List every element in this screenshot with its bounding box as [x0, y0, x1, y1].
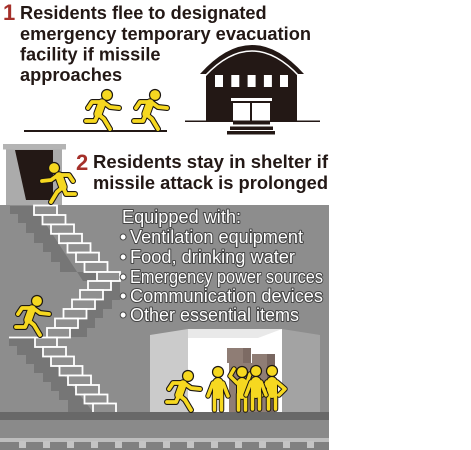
underground grey background [0, 205, 329, 450]
icon: resident entering door [42, 162, 75, 202]
equipment list: Other essential items [130, 305, 299, 325]
icon: resident on stair landing [16, 296, 49, 335]
icon: standing resident [208, 366, 228, 410]
equipment list: • [120, 286, 126, 306]
equipment list: Communication devices [130, 286, 323, 306]
ground line under runners [24, 130, 167, 132]
icon: standing resident [262, 366, 285, 409]
icon: running resident 2 [134, 90, 167, 129]
step 1 text: emergency temporary evacuation [20, 24, 311, 44]
equipment list: Equipped with: [122, 207, 241, 227]
step 2 heading [76, 150, 329, 193]
shelter entrance door [3, 144, 66, 205]
step number 2: 2 [76, 150, 88, 175]
step 1 text: facility if missile [20, 44, 161, 64]
step 1 text: approaches [20, 65, 122, 85]
equipment list: • [120, 267, 126, 287]
step 1 text: Residents flee to designated [20, 3, 267, 23]
step 2 text: Residents stay in shelter if [93, 152, 329, 172]
staircase [9, 206, 120, 416]
step number 1: 1 [3, 0, 15, 25]
step 2 text: missile attack is prolonged [93, 173, 328, 193]
equipment list: • [120, 227, 126, 247]
equipment list: Ventilation equipment [130, 227, 303, 247]
shelter room [150, 329, 320, 412]
equipment list: Food, drinking water [130, 247, 295, 267]
equipment list: • [120, 305, 126, 325]
equipment list: Emergency power sources [130, 267, 323, 287]
step 1 heading [3, 0, 311, 85]
icon: resident running into room [167, 370, 200, 410]
icon: running resident 1 [86, 90, 119, 129]
icon: evacuation facility building [185, 45, 320, 134]
equipment list: • [120, 247, 126, 267]
icon: standing resident [246, 366, 266, 409]
supply boxes [227, 348, 275, 412]
icon: resident carrying box [230, 366, 250, 410]
floor and rail [0, 412, 329, 450]
